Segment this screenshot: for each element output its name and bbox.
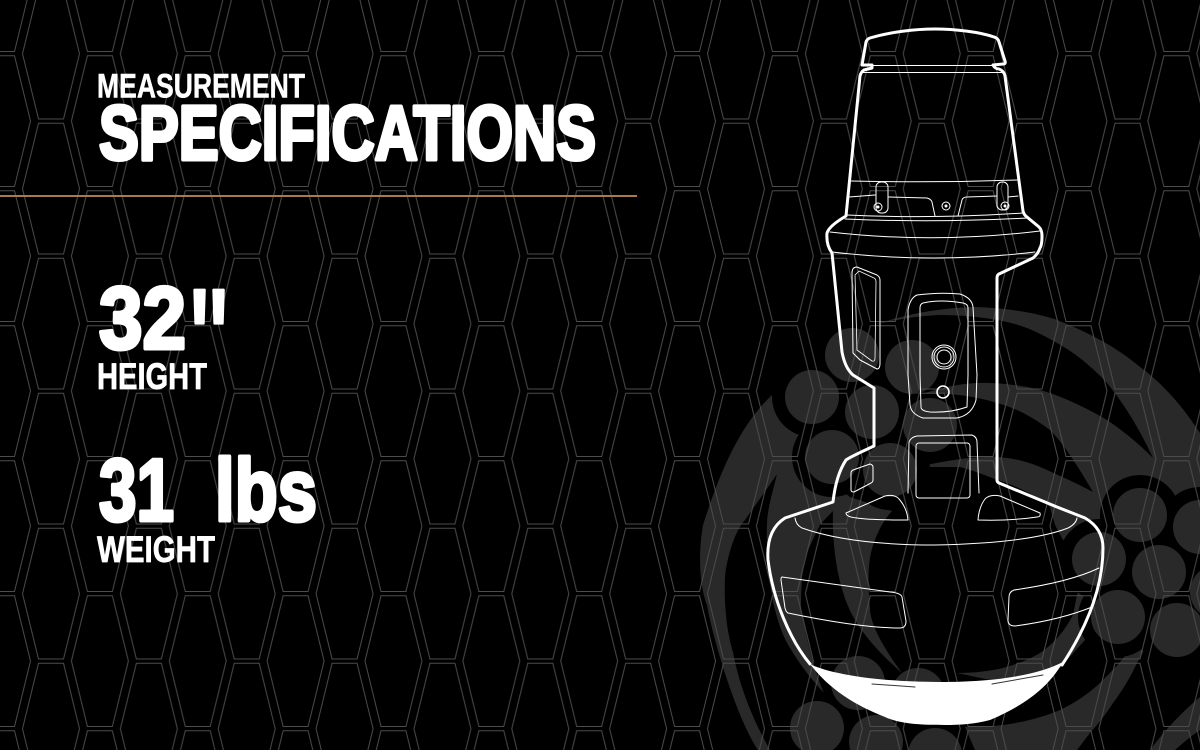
centre recess with lenses (908, 293, 977, 418)
lower hatch (908, 435, 979, 498)
weight value unit: lbs (215, 440, 317, 540)
side window (852, 267, 880, 369)
title line 1: MEASUREMENT (97, 68, 305, 106)
cap and body detail lines (830, 66, 1040, 258)
bowl panels (781, 568, 1099, 628)
device illustration (768, 29, 1103, 725)
height value: 32 (99, 268, 186, 368)
bowl slits (872, 675, 1043, 687)
bowl shoulder line (795, 518, 1077, 545)
small side window (851, 464, 873, 492)
fins (846, 495, 1040, 520)
stat: weight (97, 440, 317, 570)
latches and screws (874, 182, 1009, 213)
height label: HEIGHT (97, 356, 207, 397)
outer silhouette (768, 29, 1103, 665)
white bowl base (810, 662, 1063, 725)
weight label: WEIGHT (97, 529, 215, 570)
emblem halos (772, 357, 1200, 670)
emblem bubbles (785, 328, 1200, 750)
divider rule (0, 195, 637, 197)
emblem: spiral logo watermark (700, 307, 1200, 750)
weight value number: 31 (99, 440, 174, 540)
stat: height (97, 262, 228, 409)
height value units: '' (190, 262, 228, 409)
title (97, 68, 596, 176)
title line 2: SPECIFICATIONS (99, 90, 596, 176)
